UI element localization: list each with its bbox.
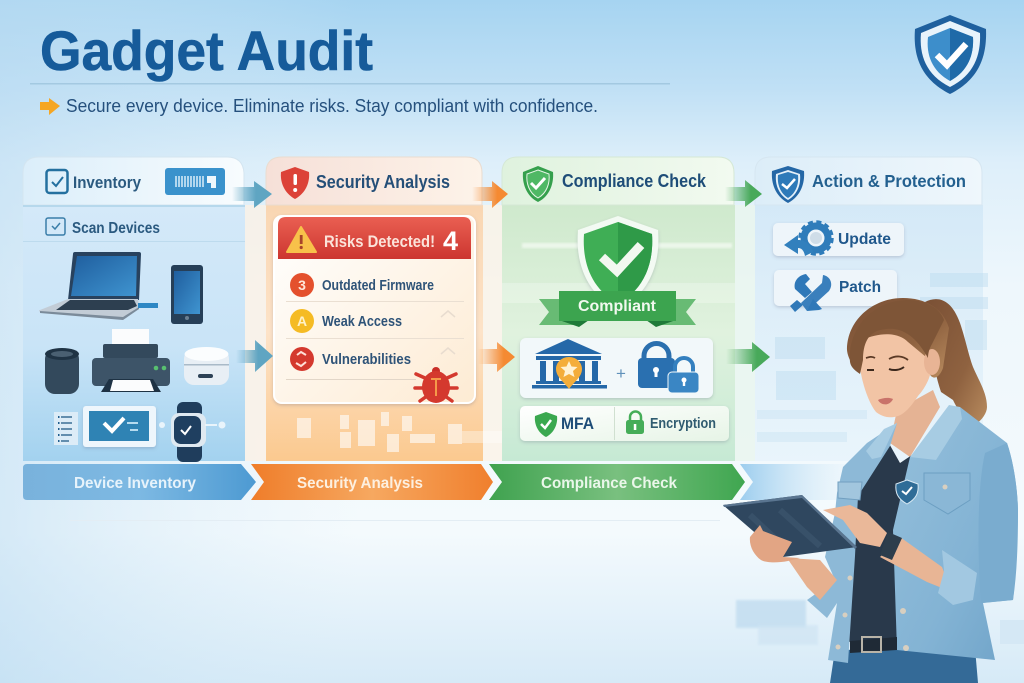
arrow: inventory to security top [232, 181, 272, 208]
label: patch: Patch [839, 279, 881, 296]
jeans [830, 648, 978, 683]
chevron: compliance check [489, 464, 745, 500]
buttons [836, 484, 948, 651]
icon: smartphone [171, 265, 203, 324]
chevron: device inventory [23, 464, 256, 500]
risk: weak access: Weak Access [322, 314, 402, 330]
heading: scan devices: Scan Devices [72, 220, 160, 237]
panel header [266, 157, 482, 205]
arrow: security to compliance middle [478, 342, 515, 372]
ear [924, 349, 940, 375]
chest pocket [924, 473, 970, 514]
icon: laptop [39, 252, 158, 320]
tablet [723, 495, 857, 557]
icon: smartwatch [171, 402, 206, 462]
chevron: compliance check: Compliance Check [541, 475, 677, 492]
ribbon: compliant [539, 291, 696, 327]
icon: green shield [523, 166, 553, 202]
risk: weak access [290, 309, 455, 333]
icon: red shield [281, 167, 309, 199]
person: woman with tablet [723, 298, 1018, 683]
icon: crossed tools [790, 274, 831, 312]
left forearm [787, 558, 837, 600]
panel: compliance check [502, 157, 735, 461]
panel header [755, 157, 982, 205]
icon: red bug [415, 367, 457, 403]
risk: weak access: A [297, 313, 307, 329]
face [860, 334, 932, 417]
subtitle: Secure every device. Eliminate risks. Stay compliant with confidence. [66, 96, 598, 116]
collar [866, 405, 962, 460]
button: update [773, 222, 904, 256]
label: update: Update [838, 231, 891, 248]
panel body [502, 205, 735, 461]
risk count: 4 [443, 226, 458, 256]
icon: inventory checkbox [46, 170, 68, 193]
card: mfa and encryption [520, 406, 729, 441]
risk: outdated firmware: Outdated Firmware [322, 278, 434, 294]
plus sign: + [616, 364, 626, 383]
banner label: Risks Detected! [324, 232, 435, 251]
label: encryption: Encryption [650, 416, 716, 432]
icon: subtitle arrow [40, 98, 60, 115]
pixel squares [297, 412, 522, 452]
header rule [30, 83, 670, 84]
arrow: inventory to security middle [236, 340, 273, 372]
chevron: action [740, 464, 850, 500]
panel body [23, 205, 245, 461]
band: process chevrons [23, 464, 850, 500]
hair front [850, 300, 944, 374]
right hand [823, 505, 887, 547]
icon: warning triangle [287, 227, 316, 252]
eyes and brows [866, 356, 908, 360]
card: risks detected [274, 216, 475, 403]
panel: action and protection [755, 157, 988, 461]
ribbon: compliant: Compliant [578, 298, 657, 315]
label: mfa: MFA [561, 414, 594, 433]
arrow: security to compliance top [472, 181, 508, 208]
belt [850, 637, 897, 653]
icon: tablet check [83, 406, 156, 447]
card: regulations and locks [520, 338, 713, 398]
shirt [845, 440, 912, 642]
ghost ui blocks [757, 273, 988, 442]
button: patch [774, 270, 897, 312]
icon: institution [532, 339, 607, 389]
sleeve shading [978, 443, 1018, 603]
chevron: security analysis: Security Analysis [297, 475, 423, 492]
lips [878, 398, 893, 404]
risk: outdated firmware: 3 [298, 277, 306, 293]
scan connector [160, 424, 217, 426]
panel: inventory [23, 157, 245, 462]
chevron: security analysis [251, 464, 493, 500]
icon: smart speaker [45, 348, 79, 394]
badge: compliant shield [578, 216, 658, 310]
arrow: compliance to action top [725, 180, 762, 207]
icon: scan checkbox [46, 218, 65, 235]
rolled cuff [938, 550, 977, 605]
icon: mfa shield [535, 412, 557, 437]
neck [890, 390, 940, 457]
right forearm [880, 537, 952, 592]
panel: security analysis [266, 157, 522, 461]
rule [23, 205, 245, 207]
panel header [23, 157, 244, 205]
icon: gear with arrow [784, 222, 832, 256]
heading: action and protection: Action & Protection [812, 171, 966, 191]
heading: security analysis: Security Analysis [316, 172, 450, 192]
panel body [755, 205, 983, 461]
icon: blue shield [772, 166, 804, 203]
icon: brand shield [915, 15, 986, 94]
panel body [266, 205, 483, 461]
icon: encryption lock [626, 412, 644, 434]
panel header [502, 157, 734, 205]
left hand [750, 525, 800, 562]
hair back [847, 298, 949, 378]
icon: barcode badge [165, 168, 225, 195]
risk: vulnerabilities: Vulnerabilities [322, 352, 411, 368]
jacket left side and sleeve [807, 423, 897, 663]
arrow: compliance to action middle [726, 342, 770, 372]
ponytail [925, 299, 987, 425]
smartwatch [880, 532, 902, 560]
heading: compliance check: Compliance Check [562, 171, 707, 191]
risk: vulnerabilities [290, 347, 455, 371]
belt buckle [862, 637, 881, 652]
title: Gadget Audit [40, 19, 373, 82]
icon: round hub [184, 347, 229, 385]
risk banner [278, 217, 471, 259]
risk: outdated firmware [290, 273, 434, 297]
jacket right side and sleeve [893, 407, 1018, 660]
icon: checklist [54, 412, 78, 445]
heading: inventory: Inventory [73, 173, 141, 192]
icon: padlocks [638, 344, 699, 393]
left pocket flap [838, 482, 862, 500]
jacket badge [896, 480, 918, 504]
chevron: device inventory: Device Inventory [74, 475, 196, 492]
icon: printer [92, 329, 170, 392]
